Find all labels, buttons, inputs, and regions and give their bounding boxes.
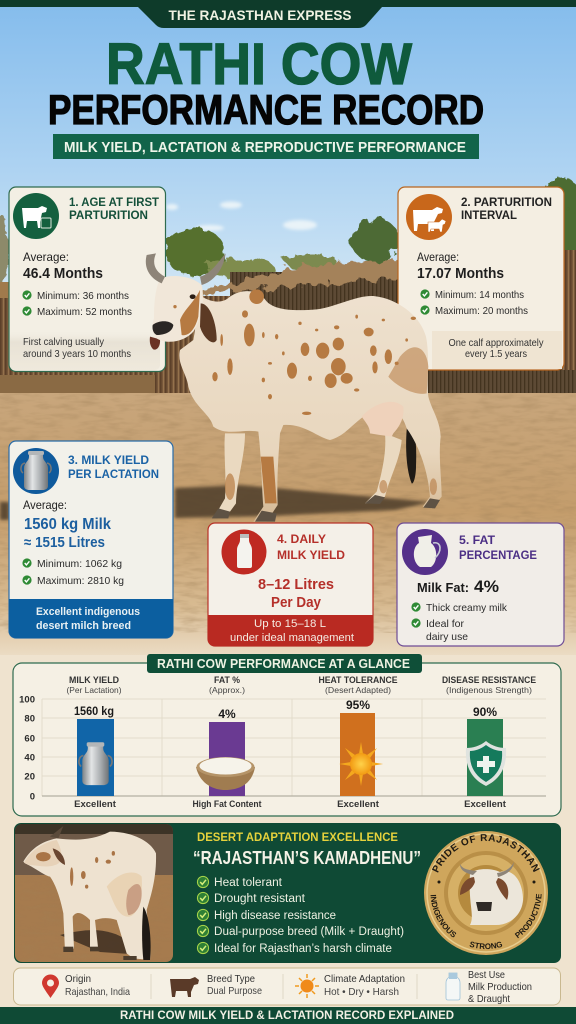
bullet list: Ideal for Rajasthan’s harsh climate — [214, 943, 392, 955]
heading — [68, 453, 159, 481]
note: One calf approximately — [448, 337, 544, 349]
item: origin — [42, 973, 130, 998]
bullet list: Heat tolerant — [214, 877, 283, 889]
axis labels: 0 — [30, 792, 35, 802]
subtitle band: MILK YIELD, LACTATION & REPRODUCTIVE PERFORMANCE — [64, 140, 466, 156]
background sandy ground — [0, 393, 576, 660]
stat — [23, 250, 103, 282]
stat: Milk Fat: — [417, 580, 469, 595]
heading: 4. DAILY — [277, 532, 326, 546]
cow ear — [200, 303, 217, 342]
panel: daily milk yield — [208, 523, 373, 646]
axis labels: 40 — [24, 752, 35, 764]
min and max: Maximum: 20 months — [435, 305, 528, 317]
cow far legs — [212, 433, 402, 518]
title: Rathi Cow: RATHI COW — [106, 32, 412, 97]
heading: PER LACTATION — [68, 467, 159, 481]
bullet list: Dual-purpose breed (Milk + Draught) — [214, 926, 404, 938]
min and max — [22, 558, 124, 587]
bar: fat percent: 4% — [218, 707, 236, 721]
bullets: Thick creamy milk — [426, 602, 508, 614]
item: best use: & Draught — [468, 993, 510, 1005]
min and max: Minimum: 1062 kg — [37, 558, 122, 570]
axis labels — [19, 694, 35, 802]
footer banner: RATHI COW MILK YIELD & LACTATION RECORD EXPLAINED — [120, 1008, 454, 1022]
bar: milk yield: MILK YIELD — [69, 675, 119, 686]
stat: 17.07 Months — [417, 265, 504, 282]
cow eye — [190, 294, 196, 299]
bar: milk yield: Excellent — [74, 799, 117, 810]
panel: age at first parturition — [9, 187, 166, 372]
photo: Rathi cow — [15, 824, 173, 962]
heading: PARTURITION — [69, 208, 148, 222]
top banner — [0, 0, 576, 28]
bar: milk yield: 1560 kg — [74, 704, 114, 718]
item: climate adaptation: Climate Adaptation — [324, 973, 405, 985]
bar: fat percent — [192, 675, 262, 810]
stat — [23, 498, 111, 551]
seal: pride of Rajasthan: INDIGENOUS — [430, 894, 456, 938]
min and max: Minimum: 14 months — [435, 289, 524, 301]
title: Performance Record: PERFORMANCE RECORD — [48, 86, 484, 133]
item: breed type: Breed Type — [207, 973, 255, 985]
heading: PERCENTAGE — [459, 548, 537, 562]
bar: heat tolerance: 95% — [346, 698, 370, 712]
cow tail — [406, 415, 416, 484]
item: best use: Best Use — [468, 969, 505, 981]
item: climate adaptation: Hot • Dry • Harsh — [324, 986, 399, 998]
seal: pride of Rajasthan: PRIDE OF RAJASTHAN — [432, 834, 540, 872]
bar: disease resistance — [442, 675, 536, 810]
bullet list: Drought resistant — [214, 893, 306, 905]
note: Up to 15–18 L — [254, 618, 326, 630]
note: Excellent indigenous — [36, 606, 140, 618]
seal cow head — [460, 862, 523, 925]
heading — [277, 532, 345, 562]
bar: heat tolerance — [318, 675, 398, 810]
min and max — [420, 289, 528, 317]
quote title: “RAJASTHAN’S KAMADHENU” — [193, 848, 421, 868]
bar: heat tolerance: Excellent — [337, 799, 380, 810]
cow body — [179, 291, 442, 522]
icon: cow and calendar — [13, 193, 59, 239]
heading — [459, 533, 537, 562]
item: breed type — [170, 973, 262, 997]
bar: disease resistance: Excellent — [464, 799, 507, 810]
axis labels: 80 — [24, 714, 35, 724]
panel: fat percentage — [397, 523, 564, 646]
panel: performance bar chart — [13, 654, 561, 816]
cow hooves — [212, 495, 440, 522]
cow udder — [362, 402, 404, 437]
bar: fat percent: High Fat Content — [192, 799, 262, 810]
bar: fat percent: FAT % — [214, 675, 241, 686]
stat: Average: — [23, 250, 69, 264]
panel: parturition interval — [398, 187, 564, 370]
note — [23, 336, 131, 360]
note: desert milch breed — [36, 620, 131, 632]
item: climate adaptation — [295, 973, 405, 998]
heading: 3. MILK YIELD — [68, 453, 149, 467]
note — [36, 606, 140, 632]
chart title tab: RATHI COW PERFORMANCE AT A GLANCE — [157, 656, 410, 671]
icon: cow and calf — [406, 194, 452, 240]
heading: 2. PARTURITION — [461, 195, 552, 209]
bar: disease resistance: DISEASE RESISTANCE — [442, 675, 536, 686]
stat: Per Day — [271, 594, 322, 611]
seal: pride of Rajasthan: STRONG — [470, 942, 502, 950]
heading — [461, 195, 552, 222]
stat: ≈ 1515 Litres — [24, 535, 105, 551]
note — [448, 337, 544, 360]
bullet list: High disease resistance — [214, 910, 336, 922]
heading: 1. AGE AT FIRST — [69, 195, 160, 209]
stat: 1560 kg Milk — [24, 516, 111, 533]
min and max: Maximum: 2810 kg — [37, 575, 124, 587]
heading — [69, 195, 160, 222]
bullet list — [197, 876, 404, 955]
background sky — [0, 0, 576, 310]
seal: pride of Rajasthan: PRODUCTIVE — [514, 894, 542, 938]
main cow photo illustration — [146, 253, 442, 522]
cow head — [152, 276, 203, 342]
stat: Average: — [23, 498, 67, 512]
bullets: Ideal for — [426, 618, 464, 630]
bullets — [411, 602, 508, 643]
background fence — [0, 250, 576, 404]
heading: INTERVAL — [461, 208, 517, 222]
cow shadow — [0, 485, 432, 520]
icon: milk can — [13, 448, 59, 494]
item: breed type: Dual Purpose — [207, 985, 262, 997]
min and max — [22, 290, 132, 318]
bar: heat tolerance: (Desert Adapted) — [325, 685, 391, 695]
heading: 5. FAT — [459, 533, 496, 547]
cow nose — [152, 321, 173, 335]
stat: 4% — [474, 577, 499, 596]
bar: heat tolerance: HEAT TOLERANCE — [318, 675, 398, 686]
panel: desert adaptation — [14, 823, 561, 963]
bar: milk yield — [66, 675, 122, 810]
stat: 8–12 Litres — [258, 576, 334, 593]
top banner: THE RAJASTHAN EXPRESS — [168, 7, 352, 23]
background trees — [0, 177, 576, 285]
axis labels: 60 — [24, 734, 35, 744]
stat — [417, 250, 504, 282]
heading: MILK YIELD — [277, 548, 345, 562]
stat — [258, 576, 334, 611]
icon: milk jug — [402, 529, 448, 575]
bar: milk yield: (Per Lactation) — [66, 685, 122, 695]
heading: DESERT ADAPTATION EXCELLENCE — [197, 830, 398, 844]
min and max: Minimum: 36 months — [37, 290, 129, 302]
item: origin: Rajasthan, India — [65, 986, 130, 998]
subtitle band — [53, 134, 479, 159]
axis labels: 100 — [19, 694, 35, 706]
note — [230, 618, 354, 644]
cow horns — [146, 253, 226, 285]
item: origin: Origin — [65, 973, 91, 985]
bullets: dairy use — [426, 631, 468, 643]
bar: disease resistance: (Indigenous Strength) — [446, 685, 532, 695]
stat: 46.4 Months — [23, 265, 103, 282]
icon: milk bottle — [222, 530, 266, 574]
cow spots — [173, 289, 437, 503]
info strip — [14, 968, 560, 1005]
note: around 3 years 10 months — [23, 348, 131, 360]
note: First calving usually — [23, 336, 105, 348]
item: best use — [446, 969, 532, 1005]
footer banner — [0, 1007, 576, 1024]
note: under ideal management — [230, 632, 354, 644]
stat — [417, 577, 499, 596]
stat: Average: — [417, 250, 459, 264]
panel: milk yield per lactation — [9, 441, 173, 638]
item: best use: Milk Production — [468, 981, 532, 993]
bar: fat percent: (Approx.) — [209, 685, 245, 695]
background clouds — [166, 202, 317, 231]
note: every 1.5 years — [465, 348, 527, 360]
lower cream background — [0, 655, 576, 1024]
seal: pride of Rajasthan — [424, 831, 548, 955]
axis labels: 20 — [24, 772, 35, 782]
cow muzzle lip — [150, 337, 160, 350]
bar: disease resistance: 90% — [473, 705, 497, 719]
min and max: Maximum: 52 months — [37, 306, 132, 318]
